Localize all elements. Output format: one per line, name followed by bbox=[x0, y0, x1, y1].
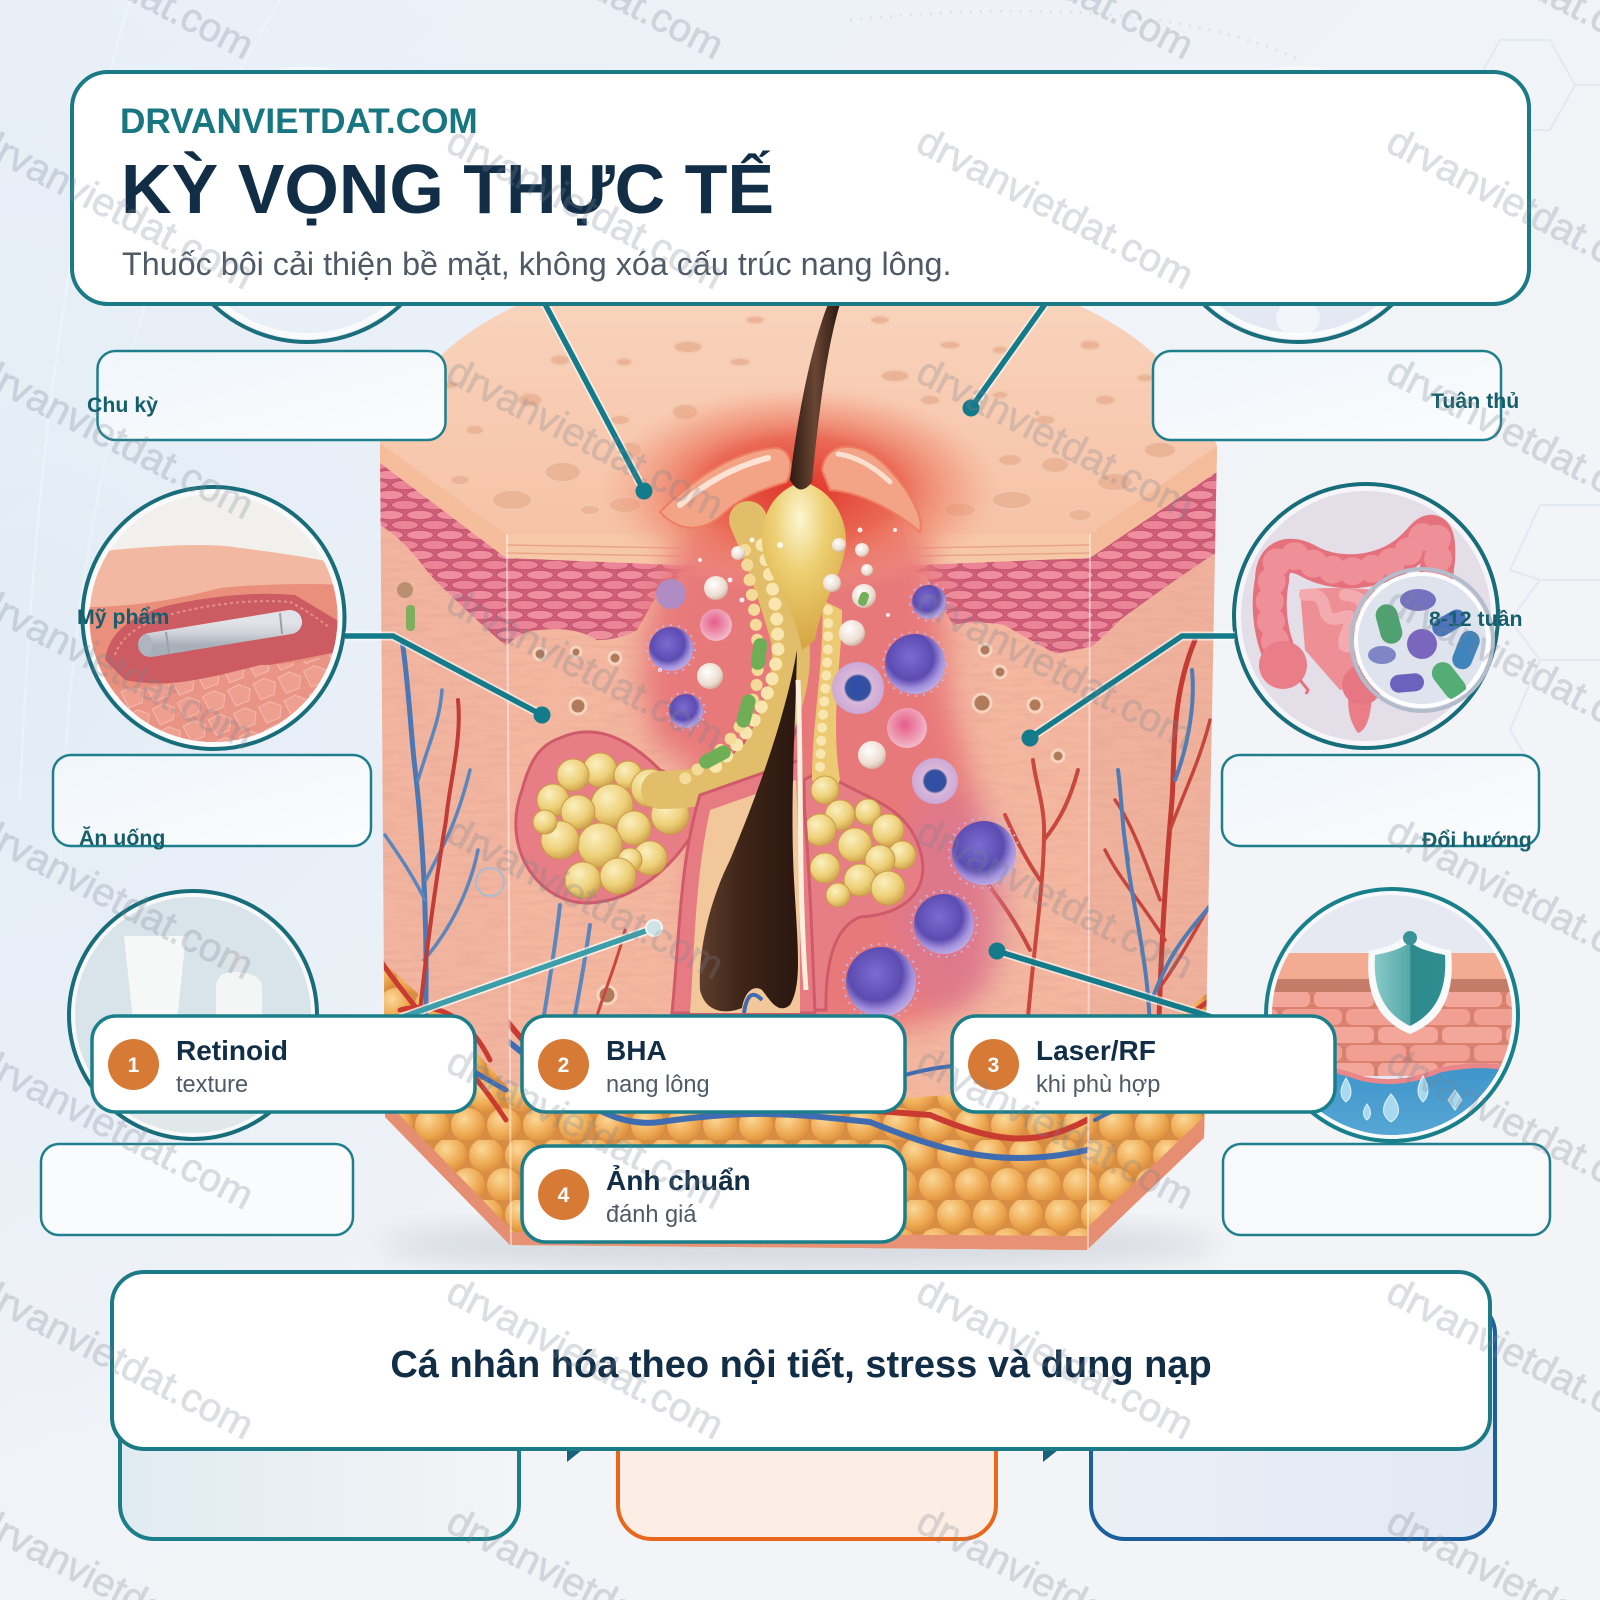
badge 1 bbox=[108, 1039, 159, 1090]
label: cosmetics: Mỹ phẩm bbox=[77, 605, 169, 629]
watermark: drvanvietdat.com bbox=[910, 579, 1201, 758]
label text: Chu kỳ bbox=[87, 393, 158, 417]
label text: Tuân thủ bbox=[1431, 389, 1519, 413]
icon: shield bbox=[1368, 930, 1452, 1034]
panel: bottom left box bbox=[120, 1330, 519, 1539]
duct with beads bbox=[660, 520, 791, 790]
watermark: drvanvietdat.com bbox=[440, 1039, 731, 1218]
card: Laser/RF bbox=[952, 1016, 1335, 1112]
card subtitle: nang lông bbox=[606, 1072, 710, 1098]
left face bbox=[380, 443, 510, 1245]
fat layer bbox=[509, 1086, 1088, 1250]
card subtitle: đánh giá bbox=[606, 1202, 697, 1228]
panel: bottom right box bbox=[1091, 1300, 1495, 1539]
card title: Laser/RF bbox=[1036, 1035, 1156, 1066]
circle: skin barrier bbox=[1265, 889, 1525, 1150]
card subtitle: khi phù hợp bbox=[1036, 1072, 1160, 1098]
watermark: drvanvietdat.com bbox=[440, 1269, 731, 1448]
watermark: drvanvietdat.com bbox=[910, 1039, 1201, 1218]
sebaceous gland right bbox=[804, 600, 923, 1010]
skin block illustration bbox=[370, 300, 1230, 1271]
stratum corneum bbox=[506, 534, 1090, 566]
circle: top right compliance bbox=[1202, 306, 1394, 344]
badge 2 bbox=[538, 1039, 589, 1090]
follicle wall bbox=[672, 760, 815, 1013]
dermal follicles bbox=[534, 644, 1064, 1004]
right face bbox=[1087, 446, 1217, 1250]
callout line: bottom right bbox=[988, 942, 1215, 1018]
comedone stick bbox=[140, 613, 290, 656]
label box: bottom right bbox=[1223, 1144, 1550, 1235]
callout line: top left to pimple edge bbox=[545, 304, 652, 500]
arrow: right chevron bbox=[1043, 1450, 1058, 1462]
bacilli bbox=[750, 637, 768, 671]
watermark: drvanvietdat.com bbox=[440, 809, 731, 988]
callout line: bottom left bbox=[400, 920, 662, 1018]
footer message: Cá nhân hóa theo nội tiết, stress và dung nạp bbox=[390, 1344, 1212, 1386]
card: Ảnh chuẩn bbox=[522, 1146, 905, 1242]
badge 3 bbox=[968, 1039, 1019, 1090]
epidermis cells bbox=[506, 558, 700, 646]
card: Retinoid bbox=[92, 1016, 475, 1112]
label: 8-12 weeks: 8-12 tuần bbox=[1429, 607, 1522, 631]
label box: middle left bbox=[53, 755, 371, 850]
watermark: drvanvietdat.com bbox=[440, 579, 731, 758]
circle: skincare products bbox=[69, 890, 320, 1150]
comedo plug bbox=[762, 482, 846, 650]
label box: bottom left bbox=[41, 1144, 353, 1235]
footer panel bbox=[112, 1272, 1490, 1449]
badge 4 bbox=[538, 1169, 589, 1220]
badge 3: 3 bbox=[988, 1054, 999, 1077]
watermark: drvanvietdat.com bbox=[910, 349, 1201, 528]
watermark: drvanvietdat.com bbox=[910, 1269, 1201, 1448]
front corner highlights bbox=[507, 534, 1090, 1250]
arrow: left chevron bbox=[567, 1450, 582, 1462]
hair shaft bbox=[790, 304, 840, 490]
circle: cosmetics comedone bbox=[80, 487, 350, 760]
callout line: top right bbox=[962, 304, 1045, 416]
badge 1: 1 bbox=[128, 1054, 140, 1077]
watermark: drvanvietdat.com bbox=[910, 119, 1201, 298]
card title: Ảnh chuẩn bbox=[606, 1164, 751, 1196]
hair bulb bbox=[700, 650, 798, 1011]
watermark: drvanvietdat.com bbox=[440, 349, 731, 528]
subtitle: Thuốc bôi cải thiện bề mặt, không xóa cấu trúc nang lông. bbox=[122, 246, 952, 282]
sebaceous gland left bbox=[516, 520, 800, 903]
title: KỲ VỌNG THỰC TẾ bbox=[121, 150, 774, 228]
card title: BHA bbox=[606, 1035, 667, 1066]
site name: DRVANVIETDAT.COM bbox=[120, 102, 478, 141]
circle: gut microbiome bbox=[1234, 484, 1498, 748]
circle: top left cycle bbox=[212, 306, 402, 344]
callout line: middle right bbox=[1022, 636, 1235, 746]
callout line: middle left bbox=[345, 636, 550, 724]
front face bbox=[500, 530, 1100, 1260]
vessels bbox=[506, 760, 1087, 1158]
watermark: drvanvietdat.com bbox=[910, 809, 1201, 988]
top face bbox=[370, 300, 1230, 540]
badge 2: 2 bbox=[558, 1054, 569, 1077]
label box: top right bbox=[1153, 351, 1519, 440]
card title: Retinoid bbox=[176, 1035, 288, 1066]
magnifier lens bbox=[1351, 569, 1493, 711]
inflammation bbox=[600, 385, 1010, 1040]
card: BHA bbox=[522, 1016, 905, 1112]
block shadow bbox=[380, 1219, 1220, 1271]
watermark: drvanvietdat.com bbox=[440, 119, 731, 298]
inflammatory cells bbox=[647, 538, 1019, 1020]
badge 4: 4 bbox=[558, 1184, 570, 1207]
label box: top left bbox=[87, 351, 446, 440]
header panel bbox=[72, 72, 1529, 304]
label box: middle right bbox=[1222, 755, 1539, 852]
label text: Đổi hướng bbox=[1422, 828, 1532, 852]
label text: Ăn uống bbox=[79, 825, 165, 850]
panel: bottom middle box bbox=[618, 1330, 996, 1539]
card subtitle: texture bbox=[176, 1072, 248, 1098]
